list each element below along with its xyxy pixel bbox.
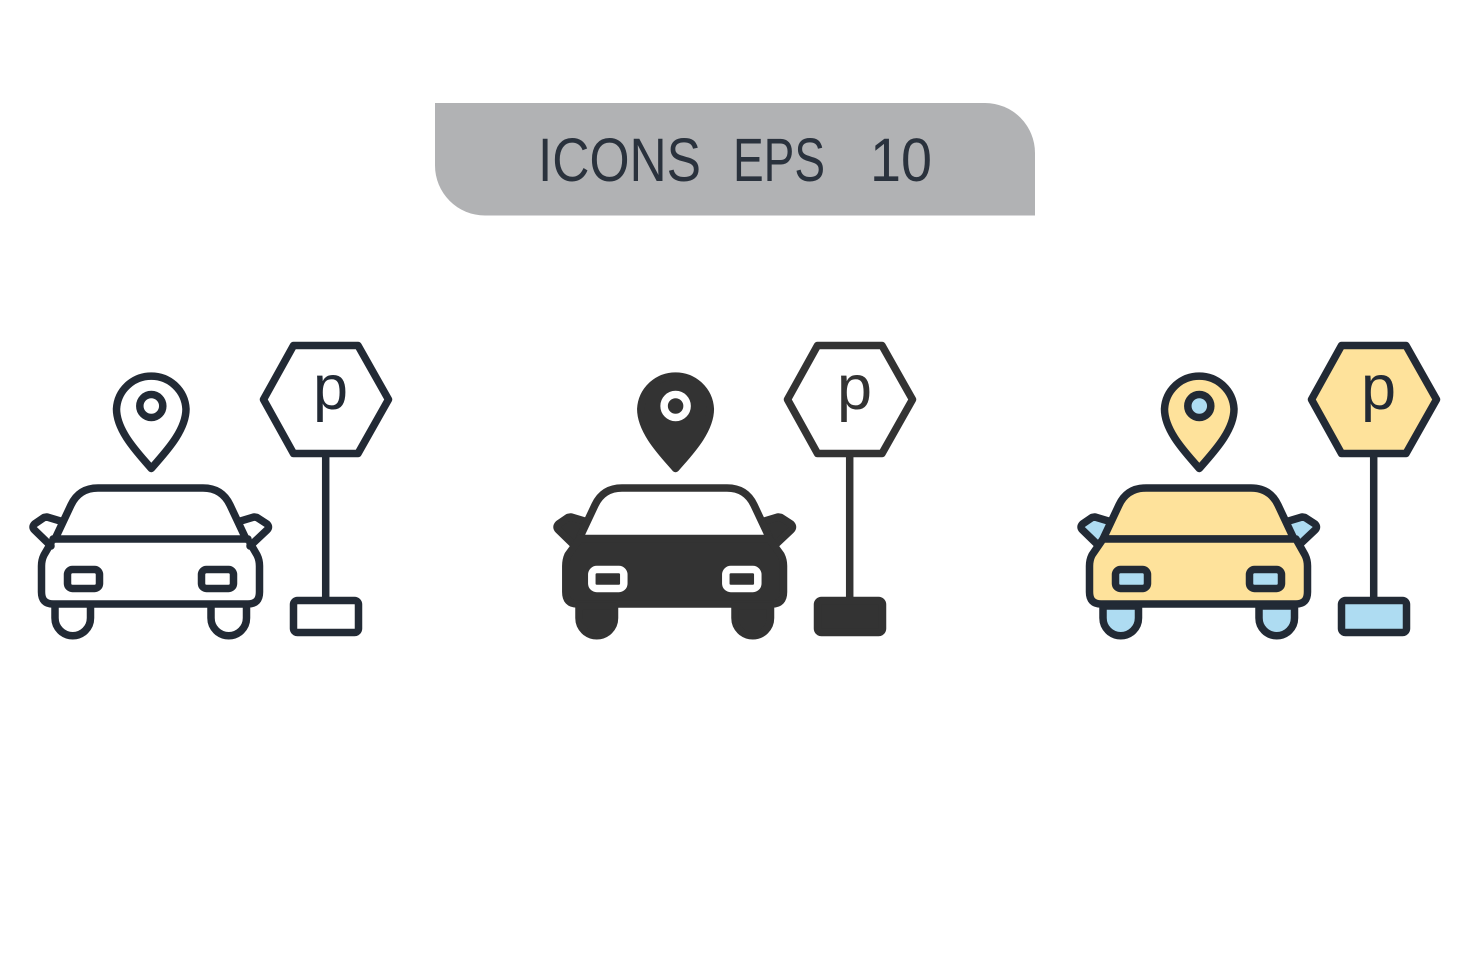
parking sign hexagon [1312,346,1436,454]
sign base [1342,600,1406,632]
pin centre [140,394,163,418]
location pin [1164,376,1234,468]
title banner: ICONS [538,126,701,194]
car mirrors [33,517,268,546]
car mirrors [557,517,792,546]
car roof [579,488,770,539]
left headlight [1116,570,1148,588]
letter p: p [313,353,348,423]
location pin [116,376,186,468]
car body [1090,539,1308,604]
sign post [846,457,853,598]
car roof [55,488,246,539]
parking sign hexagon [264,346,388,454]
title banner: EPS [733,126,825,194]
car roof [1103,488,1294,539]
left wheel [579,606,614,636]
right headlight [1250,570,1282,588]
right wheel [735,606,770,636]
location pin [641,376,710,468]
right headlight [726,570,758,588]
left wheel [1103,606,1138,636]
left headlight [68,570,100,588]
car mirrors [1081,517,1316,546]
right headlight [202,570,234,588]
left headlight [592,570,624,588]
letter p: p [837,353,872,423]
sign post [322,457,329,598]
pin centre [1188,394,1211,418]
pin centre [664,394,687,418]
windshield line [53,535,248,543]
icon: solid car parking [557,346,912,636]
icon: outline car parking [33,346,388,636]
sign base [294,600,358,632]
letter p: p [1361,353,1396,423]
sign post [1370,457,1377,598]
right wheel [1259,606,1294,636]
title banner [435,103,1035,216]
left wheel [55,606,90,636]
title banner: 10 [870,126,932,194]
car body [42,543,260,604]
sign base [818,600,882,632]
car body [566,538,784,604]
right wheel [211,606,246,636]
parking sign hexagon [788,346,912,454]
icon: coloured car parking [1081,346,1436,636]
